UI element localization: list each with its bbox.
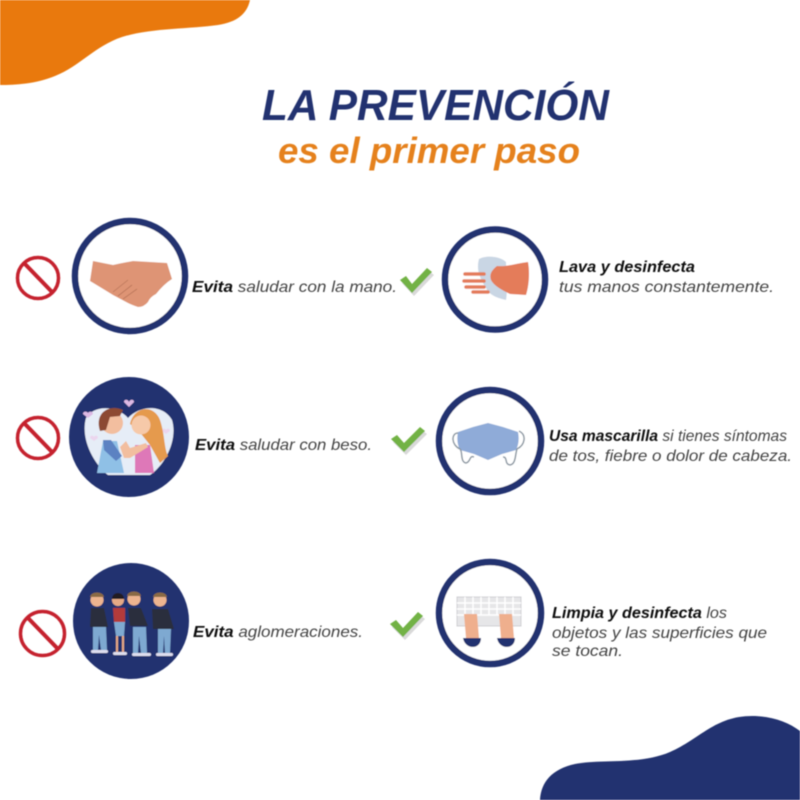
person 1 (90, 592, 108, 653)
prohibition sign 2 (18, 418, 58, 458)
person 2 (112, 593, 127, 655)
icon: face mask (439, 390, 541, 492)
person 3 (127, 592, 151, 656)
title: LA PREVENCIÓN (262, 80, 610, 130)
text: limpia y desinfecta (552, 605, 767, 660)
text: usa mascarilla: Usa mascarilla si tienes síntomas (549, 428, 787, 445)
check mark 1 (400, 268, 434, 296)
title (262, 80, 610, 171)
text: evita aglomeraciones: Evita aglomeraciones. (193, 624, 363, 641)
text: limpia y desinfecta: Limpia y desinfecta los (552, 605, 727, 622)
icon: group of people (73, 563, 189, 679)
text: usa mascarilla: de tos, fiebre o dolor de cabeza. (549, 448, 792, 465)
text: evita saludar con beso: Evita saludar con beso. (195, 437, 372, 454)
text: lava y desinfecta (559, 259, 774, 296)
prohibition sign 1 (18, 258, 58, 298)
text: limpia y desinfecta: objetos y las superficies que (552, 625, 767, 642)
text: lava y desinfecta: tus manos constantemente. (559, 279, 774, 296)
text: lava y desinfecta: Lava y desinfecta (559, 259, 695, 276)
icon: hands on keyboard (439, 562, 541, 664)
icon: handshake (75, 221, 185, 331)
text: evita saludar con la mano: Evita saludar con la mano. (192, 279, 397, 296)
text: limpia y desinfecta: se tocan. (552, 643, 623, 660)
check mark 2 (391, 427, 427, 455)
icon: couple kissing (69, 377, 189, 497)
person 4 (152, 592, 174, 656)
text: usa mascarilla (549, 428, 792, 465)
navy corner blob (540, 716, 800, 800)
icon: washing hands (445, 230, 545, 330)
title: es el primer paso (278, 130, 580, 171)
prohibition sign 3 (20, 612, 64, 656)
orange corner blob (0, 0, 250, 85)
check mark 3 (390, 612, 425, 640)
